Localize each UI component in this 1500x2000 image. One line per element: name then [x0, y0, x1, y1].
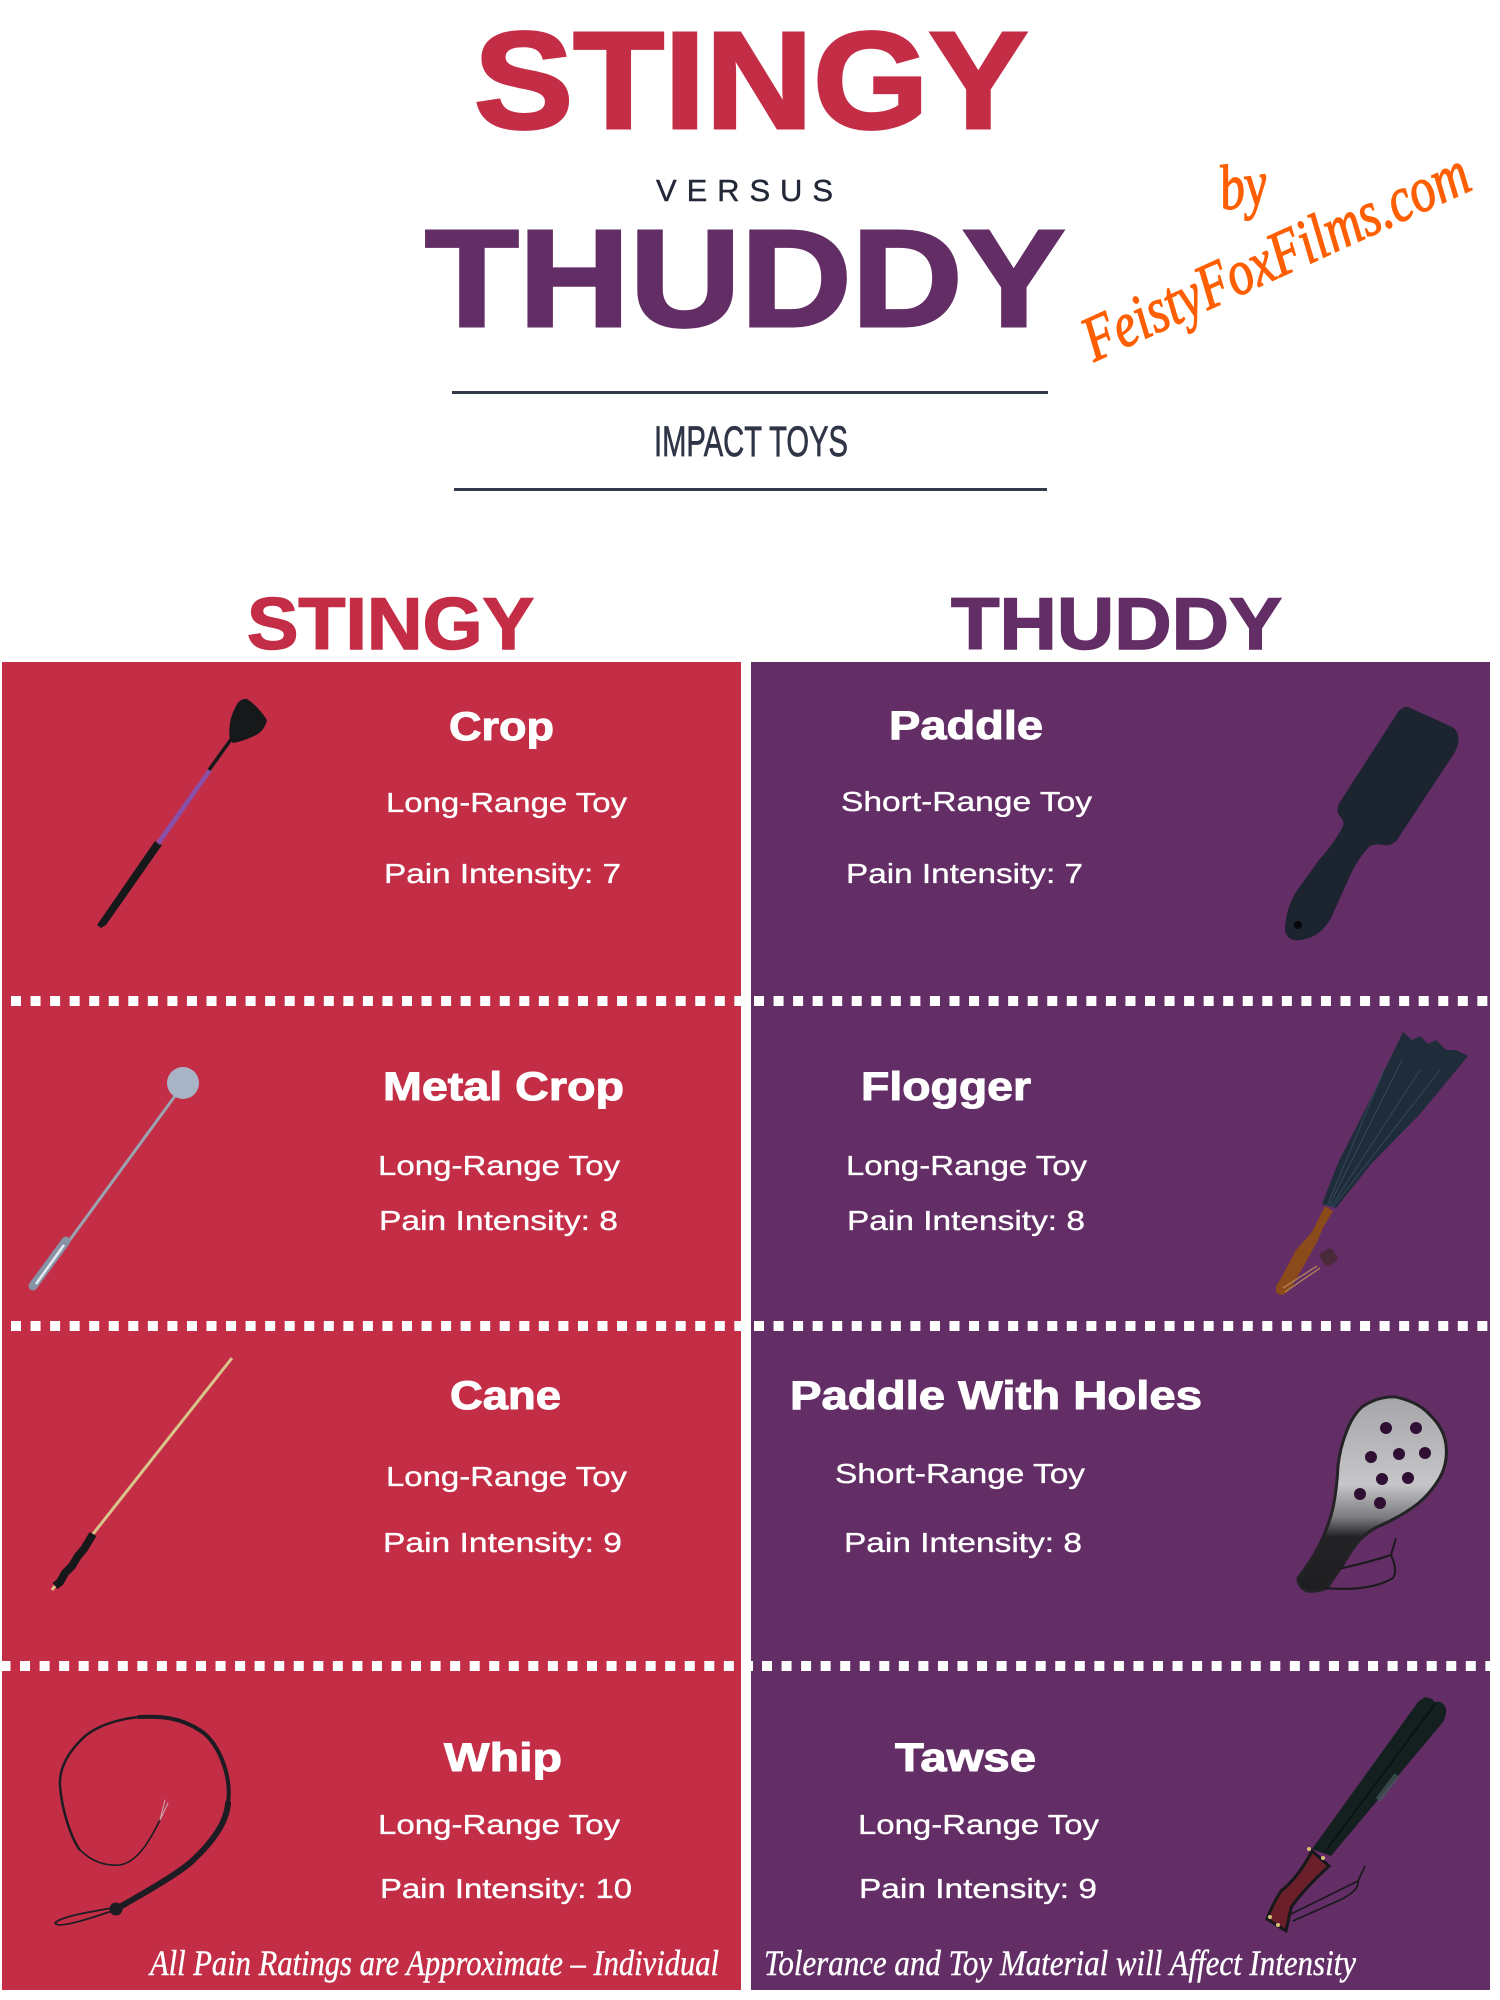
name: flogger: Flogger: [861, 1065, 1031, 1109]
icon: cane: [52, 1358, 232, 1590]
range: paddle: Short-Range Toy: [841, 786, 1092, 817]
icon: metal crop: [33, 1067, 199, 1286]
divider bottom: [454, 488, 1047, 491]
intensity: tawse: Pain Intensity: 9: [859, 1873, 1097, 1904]
heading: impact toys: IMPACT TOYS: [654, 418, 848, 466]
name: paddle with holes: Paddle With Holes: [790, 1374, 1202, 1418]
intensity: paddle with holes: Pain Intensity: 8: [844, 1527, 1082, 1558]
credit: by FeistyFoxFilms.com: by: [1214, 147, 1272, 224]
range: metal crop: Long-Range Toy: [378, 1150, 620, 1181]
column heading: thuddy: THUDDY: [951, 584, 1282, 665]
name: crop: Crop: [449, 705, 554, 749]
name: tawse: Tawse: [895, 1736, 1036, 1780]
item: paddle with holes: [790, 1374, 1446, 1591]
title: stingy: STINGY: [474, 4, 1028, 158]
panel: thuddy column: [751, 662, 1490, 1990]
item: flogger: [846, 1032, 1468, 1295]
name: paddle: Paddle: [889, 704, 1043, 748]
item: cane: [52, 1358, 627, 1590]
footnote: left half: All Pain Ratings are Approximate – Individual: [148, 1943, 719, 1983]
item: metal crop: [33, 1065, 624, 1286]
range: paddle with holes: Short-Range Toy: [835, 1458, 1085, 1489]
intensity: paddle: Pain Intensity: 7: [846, 858, 1083, 889]
subtitle: versus: VERSUS: [656, 173, 833, 208]
name: cane: Cane: [450, 1374, 561, 1418]
intensity: crop: Pain Intensity: 7: [384, 858, 621, 889]
icon: flogger: [1276, 1032, 1468, 1295]
icon: crop: [97, 699, 267, 928]
range: tawse: Long-Range Toy: [858, 1809, 1099, 1840]
range: whip: Long-Range Toy: [378, 1809, 620, 1840]
item: whip: [55, 1717, 632, 1925]
item: paddle: [841, 704, 1459, 940]
range: flogger: Long-Range Toy: [846, 1150, 1087, 1181]
intensity: flogger: Pain Intensity: 8: [847, 1205, 1085, 1236]
divider top: [452, 391, 1048, 394]
range: cane: Long-Range Toy: [386, 1461, 627, 1492]
intensity: metal crop: Pain Intensity: 8: [379, 1205, 618, 1236]
icon: paddle: [1285, 707, 1459, 940]
column heading: stingy: STINGY: [247, 584, 534, 665]
intensity: whip: Pain Intensity: 10: [380, 1873, 632, 1904]
item: crop: [97, 699, 627, 928]
name: metal crop: Metal Crop: [383, 1065, 624, 1109]
name: whip: Whip: [444, 1736, 562, 1780]
intensity: cane: Pain Intensity: 9: [383, 1527, 622, 1558]
panel: stingy column: [0, 662, 741, 1990]
range: crop: Long-Range Toy: [386, 787, 627, 818]
footnote: right half: Tolerance and Toy Material will Affect Intensity: [764, 1943, 1356, 1983]
icon: whip: [55, 1717, 229, 1925]
title: thuddy: THUDDY: [425, 202, 1065, 356]
icon: tawse: [1267, 1697, 1446, 1931]
icon: paddle with holes: [1298, 1397, 1446, 1591]
item: tawse: [858, 1697, 1446, 1931]
